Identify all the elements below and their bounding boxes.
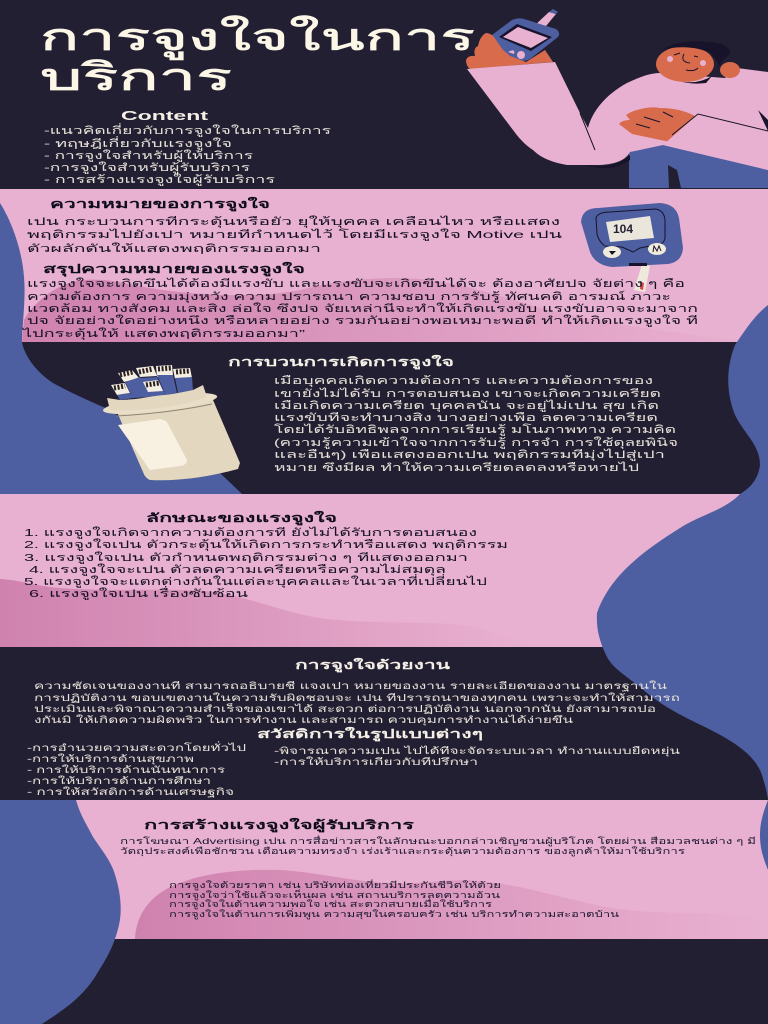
heading: ความหมายของการจูงใจ xyxy=(50,196,270,212)
text block: welfare: -พิจารณาความเปน ไปได้ทีจะจัดระบบเวลา ทำงานแบบยืดหยุ่น xyxy=(274,745,681,757)
text block: welfare: -การให้บริการเกียวกับทีปรึกษา xyxy=(274,756,478,768)
text block: meaning of motivating: ตัวผลักดันให้แสดงพฤติกรรมออกมา xyxy=(27,242,321,255)
text block: meaning of motivating: แวดล้อม ทางสังคม และสิง ล่อใจ ซึงปจ จัยเหล่านีจะทำให้เกิดแรงขับ แรงขับอาจจะมาจาก xyxy=(27,302,698,315)
text block: motivating customers: การจูงใจในด้านการเพิ่มพูน ความสุขในครอบครัว เช่น บริการทำความสะอาดบ้าน xyxy=(169,908,619,920)
hand holding meter xyxy=(466,33,553,69)
text block: motivating with work xyxy=(34,657,680,726)
text block: contents: - ทฤษฎีเกี่ยวกับแรงจูงใจ xyxy=(44,136,232,150)
text block: welfare: -การให้บริการด้านการศึกษา xyxy=(27,775,211,787)
text block: meaning of motivating: ไปกระตุ้นให้ แสดงพฤติกรรมออกมา” xyxy=(21,327,306,340)
text block: motivating customers: การโฆษณา Advertising เปน การสื่อข่าวสารในลักษณะบอกกล่าวเชิญชวนผู้บริโภค โดยผ่าน สือมวลชนต่าง ๆ มี xyxy=(120,835,756,847)
hand on chest xyxy=(619,107,695,142)
text block: motivation process: หมาย ซึงมีผล ทำให้ความเครียดลดลงหรือหายไป xyxy=(274,461,640,474)
text block: characteristics of motivation: 2. แรงจูงใจเปน ตัวกระตุ้นให้เกิดการกระทำหรือแสดง พฤติกรรม xyxy=(24,538,508,551)
panel: customer motivation background xyxy=(0,800,768,939)
panel: definition background xyxy=(0,189,768,342)
jar body xyxy=(117,400,240,480)
text block: motivating with work: ความชัดเจนของงานที สามารถอธิบายชี แจงเปา หมายของงาน รายละเอียดของงาน มาตรฐานใน xyxy=(34,680,668,692)
wave: characteristics panel xyxy=(0,579,532,647)
heading: การบวนการเกิดการจูงใจ xyxy=(228,354,454,370)
test strips xyxy=(111,365,193,400)
text block: motivation process: (ความรู้ความเข้าใจจากการรับรู้ การจำ การใช้ดุลยพินิจ xyxy=(274,436,678,449)
text block: motivation process: และอืนๆ) เพือแสดงออกเปน พฤติกรรมทีมุ่งไปสู่เปา xyxy=(274,448,665,461)
jar lid collar xyxy=(107,385,207,410)
torso and sleeve xyxy=(467,62,768,170)
text block: characteristics of motivation: 5. แรงจูงใจจะแตกต่างกันในแต่ละบุคคลและในเวลาที่เปลี่ยนไป xyxy=(24,574,488,588)
title: บริการ xyxy=(40,57,232,99)
title xyxy=(40,16,475,99)
text block: welfare: -การอำนวยความสะดวกโดยทั่วไป xyxy=(27,741,246,754)
heading: summary: สรุปความหมายของแรงจูงใจ xyxy=(43,261,305,277)
text block: motivating customers xyxy=(120,817,756,920)
text block: motivation process xyxy=(228,354,678,474)
panel: characteristics background xyxy=(0,494,768,647)
blob: lower left blue xyxy=(0,800,121,1024)
text block: motivating with work: การปฏิบัติงาน ขอบเขตงานในความรับผิดชอบจะ เปน ทีปรารถนาของทุกคน เพราะจะทำให้สามารถ xyxy=(34,692,680,704)
text block: meaning of motivating: เปน กระบวนการทีกระตุ้นหรือยัว ยุให้บุคคล เคลือนไหว หรือแสดง xyxy=(27,215,560,228)
title: การจูงใจในการ xyxy=(40,16,475,60)
text block: characteristics of motivation: 1. แรงจูงใจเกิดจากความต้องการที ยังไม่ได้รับการตอบสนอง xyxy=(24,526,477,539)
jar label xyxy=(118,419,187,470)
jar lid seam xyxy=(116,404,212,416)
text block: welfare: - การให้บริการด้านนันทนาการ xyxy=(27,764,225,776)
text block: characteristics of motivation xyxy=(24,510,508,600)
heading: การสร้างแรงจูงใจผู้รับบริการ xyxy=(144,817,415,833)
text block: characteristics of motivation: 4. แรงจูงใจจะเปน ตัวลดความเครียดหรือความไม่สมดุล xyxy=(29,563,446,576)
text block: motivation process: เขายังไม่ได้รับ การตอบสนอง เขาจะเกิดความเครียด xyxy=(274,387,661,400)
arm shadow xyxy=(585,155,630,168)
text block: welfare: -การให้บริการด้านสุขภาพ xyxy=(27,753,194,765)
heading: สวัสดิการในรูปแบบต่างๆ xyxy=(257,726,483,742)
pants xyxy=(629,135,768,188)
text block: contents: - การจูงใจสำหรับผู้ให้บริการ xyxy=(44,149,254,162)
head xyxy=(656,41,740,84)
text block: contents xyxy=(44,108,332,186)
text block: meaning of motivating: แรงจูงใจจะเกิดขึนได้ต้องมีแรงขับ และแรงขับจะเกิดขึนได้จะ ต้องอาศัยปจ จัยต่าง ๆ คือ xyxy=(27,277,685,290)
text block: motivation process: แรงขับทีจะทำบางสิง บางอย่างเพือ ลดความเครียด xyxy=(274,411,658,424)
text block: contents: -การจูงใจสำหรับผู้รับบริการ xyxy=(44,161,251,174)
text block: welfare: - การให้สวัสดิการด้านเศรษฐกิจ xyxy=(27,786,234,798)
glucose meter in hand xyxy=(492,9,559,61)
text block: motivation process: โดยได้รับอิทธิพลจากการเรียนรู้ มโนภาพทาง ความคิด xyxy=(274,423,676,436)
illustration: person with glucose meter xyxy=(466,9,768,188)
blob: right blue xyxy=(597,305,768,800)
text block: motivating with work: งกันมิ ให้เกิดความผิดพริว ในการทำงาน และสามารถ ควบคุมการทำงานได้ง่ายขึน xyxy=(34,714,574,726)
jar lid flange xyxy=(102,389,218,418)
text block: motivation process: เมือบุคคลเกิดความต้องการ และความต้องการของ xyxy=(274,374,653,387)
illustration: test strip jar xyxy=(102,365,240,480)
text block: motivating customers: การจูงใจด้วยราคา เช่น บริษัทท่องเที่ยวมีประกันชีวิตให้ด้วย xyxy=(169,879,501,891)
sleeve crease xyxy=(580,113,595,150)
meter reading: 104 xyxy=(613,222,633,236)
clipboard sleeve xyxy=(663,114,768,170)
heading: content: Content xyxy=(121,108,209,123)
wave: customer motivation panel xyxy=(135,870,768,939)
text block: characteristics of motivation: 6. แรงจูงใจเปน เรื่องซับซ้อน xyxy=(29,586,248,600)
heading: การจูงใจด้วยงาน xyxy=(295,657,451,673)
wave: definition panel xyxy=(22,278,768,342)
text block: meaning of motivating: ความต้องการ ความมุ่งหวัง ความ ปรารถนา ความชอบ การรับรู้ ทัศนคติ อารมณ์ ภาวะ xyxy=(27,290,671,303)
heading: ลักษณะของแรงจูงใจ xyxy=(146,510,337,526)
text block: motivation process: เมือเกิดความเครียด บุคคลนัน จะอยู่ไม่เปน สุข เกิด xyxy=(274,399,659,412)
text block: meaning of motivating xyxy=(21,196,698,340)
text block: motivating customers: วัตถุประสงค์เพือชักชวน เตือนความทรงจำ เร่งเร้าและกระตุ้นความต้องการ ของลูกค้าให้มาใช้บริการ xyxy=(120,846,686,857)
text block: meaning of motivating: พฤติกรรมไปยังเปา หมายทีกำหนดไว้ โดยมีแรงจูงใจ Motive เปน xyxy=(27,228,562,241)
text block: contents: -แนวคิดเกี่ยวกับการจูงใจในการบริการ xyxy=(44,123,332,137)
blob: upper left blue xyxy=(0,203,242,494)
text block: motivating customers: การจูงใจในด้านความพอใจ เช่น สะดวกสบายเมื่อใช้บริการ xyxy=(169,898,493,910)
text block: meaning of motivating: ปจ จัยอย่างใดอย่างหนึง หรือหลายอย่าง รวมกันอย่างพอเหมาะพอดี ทำให้เกิดแรงจูงใจ ที xyxy=(27,314,698,327)
text block: contents: - การสร้างแรงจูงใจผู้รับบริการ xyxy=(44,173,276,186)
text block: motivating with work: ประเมินและพิจาณาความสำเร็จของเขาได้ สะดวก ต่อการปฏิบัติงาน นอกจากนัน ยังสามารถปอ xyxy=(34,702,656,715)
text block: motivating customers: การจูงใจว่าใช้แล้วจะเห็นผล เช่น สถานบริการลดความอ้วน xyxy=(169,889,500,901)
blob: small right blue xyxy=(760,800,768,870)
text block: characteristics of motivation: 3. แรงจูงใจเปน ตัวกำหนดพฤติกรรมต่าง ๆ ทีแสดงออกมา xyxy=(24,551,468,564)
text block: welfare xyxy=(27,726,681,798)
illustration: glucose meter xyxy=(581,203,683,292)
